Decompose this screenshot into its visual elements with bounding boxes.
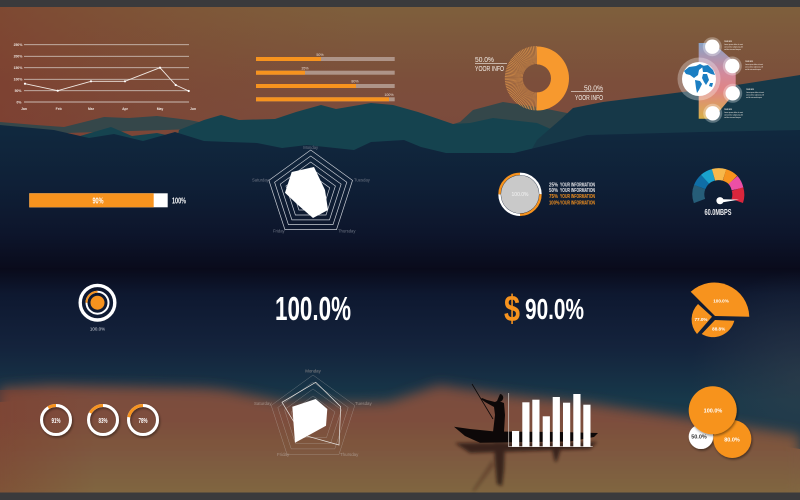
node captions: YOUR INFO: [724, 109, 732, 111]
globe: [682, 62, 716, 96]
node captions: consectetur adipiscing elit: [724, 46, 743, 48]
chart axis labels: 250%: [14, 43, 22, 47]
big number: $ 90.0%: 90.0%: [525, 294, 584, 326]
big number: $ 90.0%: [504, 288, 584, 329]
node centres: [705, 40, 740, 121]
chart axis labels: Apr: [122, 107, 129, 111]
node captions: Lorem ipsum dolor sit amet: [745, 63, 763, 66]
chart axis labels: 0%: [17, 100, 21, 104]
target icon: [80, 285, 115, 332]
radar labels: Friday: [273, 228, 286, 234]
target arc: [86, 292, 98, 303]
chart axis labels: 50%: [15, 89, 21, 93]
node captions: [724, 41, 764, 119]
percentage rings: [42, 405, 158, 434]
gauge value: 60.0MBPS: [704, 207, 732, 217]
target centre: [90, 296, 104, 310]
ring legend: 75%: [549, 194, 558, 200]
bar chart: [508, 393, 593, 447]
horizontal progress bars: [256, 53, 395, 101]
bar values: 100%: [384, 93, 394, 97]
node captions: sed do eiusmod tempor: [724, 48, 741, 51]
gauge hub: [716, 197, 724, 204]
ring legend: [549, 182, 595, 207]
radar labels: Saturday: [254, 401, 272, 406]
icon: continents: [684, 64, 715, 93]
boat reflection: [455, 442, 597, 491]
top frame band: [0, 0, 800, 7]
node captions: YOUR INFO: [724, 41, 732, 43]
boat pole: [472, 384, 493, 419]
radar chart: outline: [254, 368, 372, 457]
boatman: [481, 394, 505, 432]
ring legend: YOUR INFORMATION: [560, 194, 595, 200]
boat hull: [454, 427, 598, 443]
chart axis labels: 100%: [14, 78, 22, 82]
speed gauge: [698, 174, 739, 217]
exploded pie chart: [691, 283, 749, 337]
radar shape: [292, 399, 327, 443]
radar labels: Friday: [277, 452, 290, 457]
node captions: YOUR INFO: [745, 61, 753, 63]
ring legend: YOUR INFORMATION: [560, 201, 595, 207]
chart points: [24, 67, 190, 92]
node captions: Lorem ipsum dolor sit amet: [746, 91, 764, 94]
radar labels: Tuesday: [355, 401, 372, 406]
node captions: sed do eiusmod tempor: [746, 96, 762, 99]
bubble: 80.0%: 80.0%: [724, 438, 740, 444]
donut labels: [475, 55, 603, 102]
radar labels: [254, 368, 372, 457]
ring: 78%: 78%: [138, 416, 148, 425]
bar labels: 100%: [172, 196, 186, 205]
chart axis labels: May: [157, 107, 163, 111]
chart axis labels: Jan: [21, 107, 27, 111]
ring legend: YOUR INFORMATION: [560, 182, 595, 188]
node captions: consectetur adipiscing elit: [745, 66, 763, 68]
chart axis labels: [14, 43, 196, 111]
chart axis labels: 150%: [14, 66, 22, 70]
node circles: [703, 37, 742, 123]
globe halo: [678, 58, 720, 100]
ring legend: 50%: [549, 188, 558, 194]
node captions: YOUR INFO: [746, 89, 754, 91]
big number: 100.0%: 100.0%: [275, 290, 351, 327]
node captions: Lorem ipsum dolor sit amet: [724, 43, 743, 46]
radar outline series: [282, 382, 341, 445]
chart axis labels: Jun: [190, 107, 196, 111]
bubble: 50.0%: 50.0%: [691, 434, 707, 440]
chart line: [25, 68, 189, 91]
gradient band: [699, 43, 736, 119]
node captions: consectetur adipiscing elit: [746, 94, 764, 96]
node captions: consectetur adipiscing elit: [724, 114, 743, 116]
chart axis labels: 200%: [14, 55, 22, 59]
pie labels: [694, 298, 729, 332]
radar labels: Thursday: [338, 228, 356, 234]
bubble: 100.0%: 100.0%: [704, 408, 722, 414]
ring pie with legend: [500, 174, 595, 215]
bar values: 80%: [351, 80, 359, 84]
ring legend: 100%: [549, 201, 560, 207]
hatched half: [514, 55, 537, 101]
ring segments: [500, 174, 540, 215]
chart axis labels: Feb: [56, 107, 62, 111]
bar values: 35%: [301, 66, 309, 70]
radar labels: [252, 145, 371, 234]
pie labels: 88.8%: [712, 326, 725, 332]
radar labels: Monday: [303, 145, 319, 150]
target label: 100.0%: [90, 326, 105, 332]
bar labels: [92, 196, 186, 205]
donut labels: YOOR INFO: [475, 64, 504, 73]
donut labels: YOOR INFO: [575, 93, 603, 102]
globe infographic: [678, 37, 764, 123]
node captions: Lorem ipsum dolor sit amet: [724, 111, 743, 114]
bubble chart: [689, 386, 751, 458]
orange half: [537, 46, 569, 110]
radar labels: Monday: [305, 368, 322, 374]
radar chart: filled: [252, 145, 371, 234]
ring value: 100.0%: [512, 192, 529, 198]
node captions: sed do eiusmod tempor: [724, 116, 741, 119]
bottom frame band: [0, 492, 800, 500]
pie labels: 77.0%: [694, 317, 708, 322]
ring legend: YOUR INFORMATION: [560, 188, 595, 194]
bar values: 50%: [316, 53, 324, 57]
boat silhouette: [454, 384, 598, 491]
line chart: [14, 43, 196, 111]
ring: 91%: 91%: [52, 416, 61, 425]
big number: $ 90.0%: $: [504, 288, 520, 329]
90 percent progress bar: [29, 193, 186, 207]
donut labels: 50.0%: [475, 55, 494, 64]
donut labels: 50.0%: [584, 84, 603, 92]
radar labels: Tuesday: [354, 178, 371, 182]
radar labels: Saturday: [252, 178, 270, 182]
chart axis labels: Mar: [88, 107, 95, 111]
node captions: sed do eiusmod tempor: [745, 68, 761, 71]
bar labels: 90%: [92, 196, 104, 205]
ring legend: 25%: [549, 182, 558, 188]
donut chart: [475, 46, 603, 110]
radar shape: [285, 167, 328, 218]
radar labels: Thursday: [340, 452, 359, 457]
pie labels: 100.0%: [713, 298, 729, 304]
bar values: [301, 53, 394, 97]
orange bar fills: [256, 57, 389, 101]
gauge needle: [723, 199, 739, 202]
ring: 83%: 83%: [98, 416, 108, 425]
